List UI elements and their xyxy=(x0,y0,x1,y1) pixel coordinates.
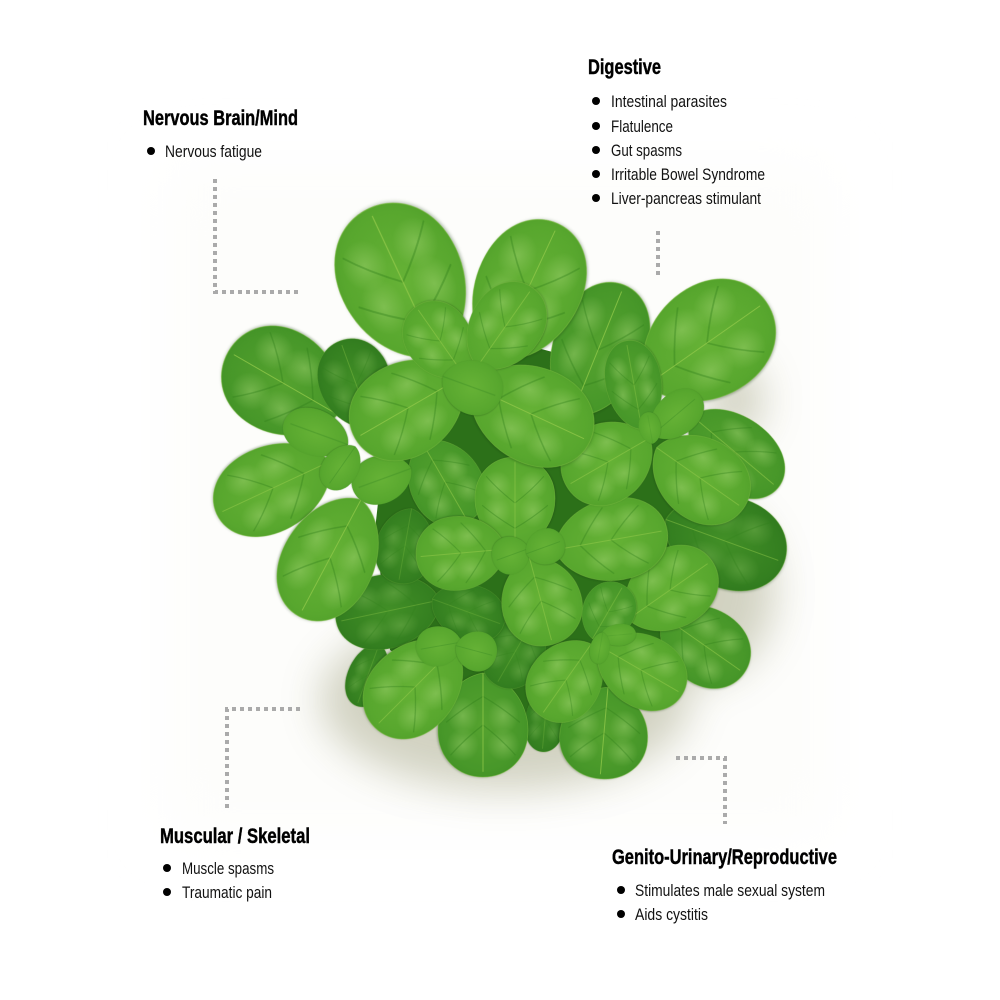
heading: genito-urinary: Genito-Urinary/Reproductive xyxy=(612,846,837,869)
block: genito-urinary xyxy=(612,846,837,924)
heading: digestive: Digestive xyxy=(588,56,661,79)
leaf: bottom middle front xyxy=(511,623,621,737)
leaf: left bottom xyxy=(258,478,402,638)
leaf: right cluster b xyxy=(633,414,767,542)
item: Stimulates male sexual system xyxy=(635,881,825,900)
item: Liver-pancreas stimulant xyxy=(611,189,761,208)
leaf: dark lower centre xyxy=(423,573,513,651)
leaf: bottom right xyxy=(556,683,652,783)
leaf: small cluster lower left a xyxy=(413,622,465,670)
leaf: left cluster top xyxy=(276,400,356,466)
heading: muscular: Muscular / Skeletal xyxy=(160,825,310,848)
leaf cast shadow xyxy=(320,360,775,790)
bullets xyxy=(617,886,625,918)
leaf: left lower xyxy=(199,423,347,553)
leaf: back right xyxy=(669,388,801,516)
leaf: back lower right xyxy=(650,476,800,606)
leaf: small left centre xyxy=(345,446,419,512)
leaf: centre top xyxy=(475,457,555,549)
item: Flatulence xyxy=(611,117,673,136)
leaf: small cluster lower right xyxy=(570,572,646,652)
leaf: top cluster small xyxy=(434,351,510,423)
item: Intestinal parasites xyxy=(611,92,727,111)
leaf: back lower left xyxy=(338,637,398,713)
leaf: small cluster lower left b xyxy=(451,626,501,676)
bullets xyxy=(592,97,600,202)
leaf: top large xyxy=(313,182,493,382)
plant illustration xyxy=(199,182,801,783)
leaf: dark left middle xyxy=(370,504,440,588)
leaf: top cluster left xyxy=(389,288,491,394)
leaf: top right xyxy=(448,202,606,380)
item: Gut spasms xyxy=(611,141,682,160)
leaf: left cluster small xyxy=(312,436,370,498)
leaf: bottom left front xyxy=(344,616,486,758)
leaf: centre right large xyxy=(452,343,610,485)
leaf: dark lower left xyxy=(328,564,448,658)
item: Aids cystitis xyxy=(635,905,708,924)
connector: genito-urinary xyxy=(676,758,725,824)
item: Irritable Bowel Syndrome xyxy=(611,165,765,184)
leaf: left upper xyxy=(202,306,364,460)
leaf: small cluster bud xyxy=(599,622,637,648)
dark centre mass xyxy=(375,330,720,720)
leaf: centre left xyxy=(413,512,509,594)
leaf: dark upper left xyxy=(306,328,406,440)
item: Muscle spasms xyxy=(182,859,274,878)
leaf: upper right back xyxy=(529,268,667,432)
connector: digestive xyxy=(656,231,660,276)
leaf: small cluster bud lower xyxy=(587,631,613,665)
item: Nervous fatigue xyxy=(165,142,262,161)
soft off-white backdrop xyxy=(170,170,830,830)
block: muscular xyxy=(160,825,310,902)
leaf: bottom right front xyxy=(581,615,701,725)
leaf: right cluster small xyxy=(639,379,713,451)
leaf: dark centre xyxy=(391,424,499,540)
leaf: dark lower middle xyxy=(470,604,560,700)
leaf: right centre xyxy=(548,490,674,590)
connector: muscular xyxy=(227,709,302,808)
connector: nervous xyxy=(215,179,298,292)
leaf: far upper right xyxy=(616,256,798,430)
heading: nervous: Nervous Brain/Mind xyxy=(143,107,298,130)
item: Traumatic pain xyxy=(182,883,272,902)
leaf: back bottom stub xyxy=(522,686,568,754)
leaf: centre bottom xyxy=(491,547,591,655)
leaf: right cluster a xyxy=(546,403,670,521)
leaf: centre left large xyxy=(332,337,484,479)
bullet xyxy=(147,147,155,155)
leaf: bottom centre xyxy=(438,673,528,777)
leaf: small centre b xyxy=(520,523,570,571)
block: nervous xyxy=(143,107,298,161)
block: digestive xyxy=(588,56,765,208)
leaf: lower right xyxy=(642,586,766,704)
bullets xyxy=(163,864,171,896)
leaf: right lower middle xyxy=(606,529,734,651)
leaf: right cluster upright xyxy=(599,336,669,434)
leaf: top cluster right xyxy=(448,267,562,387)
leaf: right cluster bud xyxy=(636,410,664,446)
leaf: small centre a xyxy=(487,531,535,579)
